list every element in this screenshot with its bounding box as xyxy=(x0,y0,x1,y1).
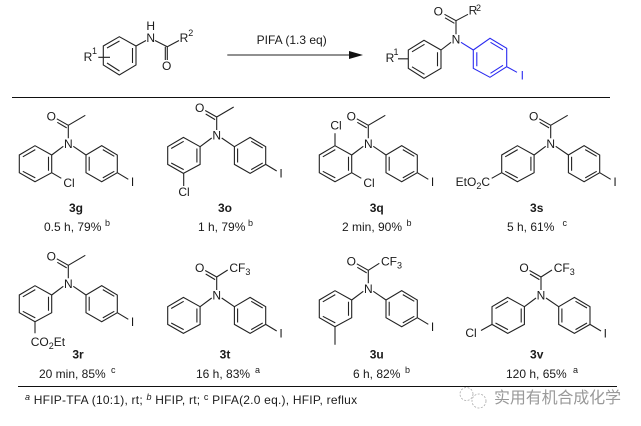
product with blue iodophenyl ring: O xyxy=(434,4,443,18)
product with blue iodophenyl ring: N xyxy=(452,32,460,46)
footnote: a xyxy=(25,392,30,402)
compound 3r: Et xyxy=(54,335,66,349)
footnote: PIFA(2.0 eq.), HFIP, reflux xyxy=(209,393,357,407)
label 3t xyxy=(196,348,260,381)
label 3v xyxy=(506,348,578,381)
label 3g: 0.5 h, 79% xyxy=(44,220,102,234)
compound 3v: O xyxy=(519,261,529,275)
label 3r xyxy=(39,348,116,381)
compound 3t xyxy=(168,261,283,341)
product with blue iodophenyl ring xyxy=(386,3,524,82)
compound 3u: N xyxy=(364,282,373,296)
compound 3o: O xyxy=(195,101,204,115)
label 3o: 1 h, 79% xyxy=(198,220,246,234)
compound 3v: 3 xyxy=(570,267,575,277)
compound 3t: I xyxy=(279,327,283,341)
footnote: HFIP-TFA (10:1), rt; xyxy=(30,393,146,407)
reaction arrow with PIFA conditions xyxy=(227,33,363,59)
bottom divider xyxy=(18,386,617,388)
compound 3u: 3 xyxy=(397,260,402,270)
label 3s: c xyxy=(562,218,568,228)
compound 3v xyxy=(465,261,607,341)
compound 3o xyxy=(168,101,283,199)
label 3r: 3r xyxy=(72,348,84,362)
label 3u: b xyxy=(405,365,410,375)
compound 3q: N xyxy=(364,137,373,151)
label 3v: 3v xyxy=(530,348,544,362)
compound 3g: Cl xyxy=(63,176,75,190)
compound 3u: CF xyxy=(381,254,397,268)
label 3o xyxy=(198,201,253,234)
compound 3r: O xyxy=(47,249,56,263)
reactant: N-aryl amide xyxy=(84,19,193,75)
compound 3t: N xyxy=(212,288,221,302)
reactant: N-aryl amide: 1 xyxy=(92,46,97,56)
label 3q: b xyxy=(406,218,412,228)
compound 3v: I xyxy=(604,327,607,341)
compound 3s: EtO xyxy=(456,175,476,189)
compound 3q: Cl xyxy=(363,176,375,190)
compound 3u: O xyxy=(347,254,356,268)
footnote: b xyxy=(146,392,152,402)
product with blue iodophenyl ring: R xyxy=(386,51,395,65)
compound 3s: C xyxy=(481,175,490,189)
label 3v: 120 h, 65% xyxy=(506,367,567,381)
label 3s xyxy=(507,201,568,234)
compound 3r: 2 xyxy=(49,341,54,351)
reactant: N-aryl amide: R xyxy=(180,31,189,45)
label 3r: c xyxy=(111,365,116,375)
label 3u: 3u xyxy=(370,348,384,362)
top divider xyxy=(12,96,610,98)
compound 3q: I xyxy=(431,175,434,189)
compound 3r: N xyxy=(64,277,73,291)
compound 3o: I xyxy=(279,167,283,181)
product with blue iodophenyl ring: I xyxy=(521,68,524,82)
compound 3r xyxy=(19,249,134,351)
label 3t: 16 h, 83% xyxy=(196,367,250,381)
compound 3v: Cl xyxy=(465,326,477,340)
compound 3v: N xyxy=(537,288,545,302)
product with blue iodophenyl ring: 2 xyxy=(476,3,481,13)
label 3s: 5 h, 61% xyxy=(507,220,555,234)
compound 3s: N xyxy=(546,137,555,151)
compound 3s: O xyxy=(529,109,538,123)
label 3g: 3g xyxy=(69,201,83,215)
compound 3v: CF xyxy=(554,261,570,275)
label 3q xyxy=(342,201,412,234)
compound 3u: I xyxy=(431,320,434,334)
label 3o: b xyxy=(248,218,253,228)
watermark xyxy=(460,388,621,408)
compound 3t: O xyxy=(195,261,204,275)
label 3o: 3o xyxy=(218,201,232,215)
compound 3s: 2 xyxy=(476,181,481,191)
label 3q: 3q xyxy=(370,201,384,215)
label 3u xyxy=(353,348,410,381)
compound 3g: I xyxy=(131,175,134,189)
compound 3r: CO xyxy=(31,335,49,349)
reactant: N-aryl amide: O xyxy=(162,59,171,73)
compound 3g xyxy=(19,109,134,190)
product with blue iodophenyl ring: R xyxy=(469,3,478,17)
label 3q: 2 min, 90% xyxy=(342,220,402,234)
label 3g: b xyxy=(105,218,110,228)
compound 3r: I xyxy=(131,315,134,329)
reactant: N-aryl amide: H xyxy=(146,19,155,33)
compound 3g: O xyxy=(47,109,56,123)
compound 3g: N xyxy=(64,137,73,151)
reactant: N-aryl amide: R xyxy=(84,50,93,64)
compound 3t: 3 xyxy=(245,267,250,277)
reactant: N-aryl amide: 2 xyxy=(188,28,193,38)
reactant: N-aryl amide: N xyxy=(146,31,155,45)
compound 3u xyxy=(319,254,434,345)
label 3g xyxy=(44,201,110,234)
compound 3s: I xyxy=(613,175,617,189)
compound 3q: Cl xyxy=(330,118,342,132)
watermark: 实用有机合成化学 xyxy=(494,389,621,407)
reaction arrow with PIFA conditions: PIFA (1.3 eq) xyxy=(257,33,327,47)
footnote: c xyxy=(204,392,209,402)
compound 3t: CF xyxy=(229,261,245,275)
compound 3o: N xyxy=(212,128,221,142)
compound 3s xyxy=(456,109,617,191)
compound 3o: Cl xyxy=(178,185,190,199)
label 3t: 3t xyxy=(220,348,230,362)
label 3t: a xyxy=(255,365,260,375)
compound 3q: O xyxy=(347,109,356,123)
label 3s: 3s xyxy=(530,201,544,215)
compound 3q xyxy=(319,109,434,190)
label 3r: 20 min, 85% xyxy=(39,367,106,381)
label 3v: a xyxy=(573,365,578,375)
label 3u: 6 h, 82% xyxy=(353,367,401,381)
product with blue iodophenyl ring: 1 xyxy=(393,47,399,57)
footnote: HFIP, rt; xyxy=(152,393,204,407)
